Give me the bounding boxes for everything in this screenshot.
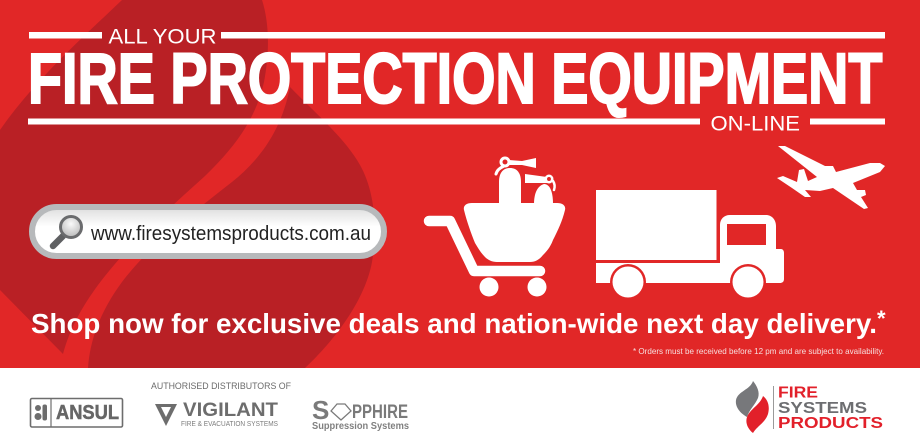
logo: fire systems products: PRODUCTS [778,415,883,432]
logo flame grey [736,381,759,417]
background flame: lower [88,87,375,368]
logo: fire systems products: FIRE [778,384,818,402]
bottom rule right [810,118,885,124]
front wheel [730,264,766,300]
rear wheel [610,264,646,300]
background flame: upper [0,0,268,354]
logo: sapphire: S [312,395,329,425]
icon: delivery truck [596,190,784,300]
logo: sapphire: PPHIRE [352,402,408,423]
footnote: * Orders must be received before 12 pm and are subject to availability. [633,346,884,356]
heading: on-line: ON-LINE [710,112,800,136]
logo: vigilant: VIGILANT [183,400,278,421]
website address: www.firesystemsproducts.com.au [90,223,371,245]
icon: shopping cart with extinguishers [429,158,565,296]
small extinguisher [525,174,555,204]
tagline asterisk: * [877,306,886,331]
main title: FIRE PROTECTION EQUIPMENT [28,38,882,119]
logo: ansul [30,398,122,427]
heading group [28,26,885,136]
truck chassis and cab [596,215,784,283]
basket [464,203,565,262]
logo: sapphire: Suppression Systems [312,421,409,432]
logo: fire systems products [736,381,883,433]
search bar [32,207,384,256]
large extinguisher [496,158,536,204]
cab window [727,224,766,245]
tagline: Shop now for exclusive deals and nation-wide next day delivery. [31,308,877,339]
authorised distributors label: AUTHORISED DISTRIBUTORS OF [151,381,291,391]
cart wheels [480,278,498,296]
bottom rule left [28,118,700,124]
logo: fire systems products: SYSTEMS [778,400,867,417]
icon: magnifying glass [53,216,82,246]
top rule left [29,32,102,38]
search bar pill [32,207,384,256]
truck box [596,190,716,260]
logo flame red [746,396,769,433]
icon: aeroplane [777,146,885,209]
logo: vigilant [155,400,278,428]
top rule right [221,32,885,38]
logo: vigilant: FIRE & EVACUATION SYSTEMS [181,419,278,428]
heading: all your: ALL YOUR [108,26,216,48]
cart frame [429,221,540,271]
logo: sapphire [312,395,409,432]
footer panel [0,368,920,448]
logo: ansul: ANSUL [56,402,119,424]
